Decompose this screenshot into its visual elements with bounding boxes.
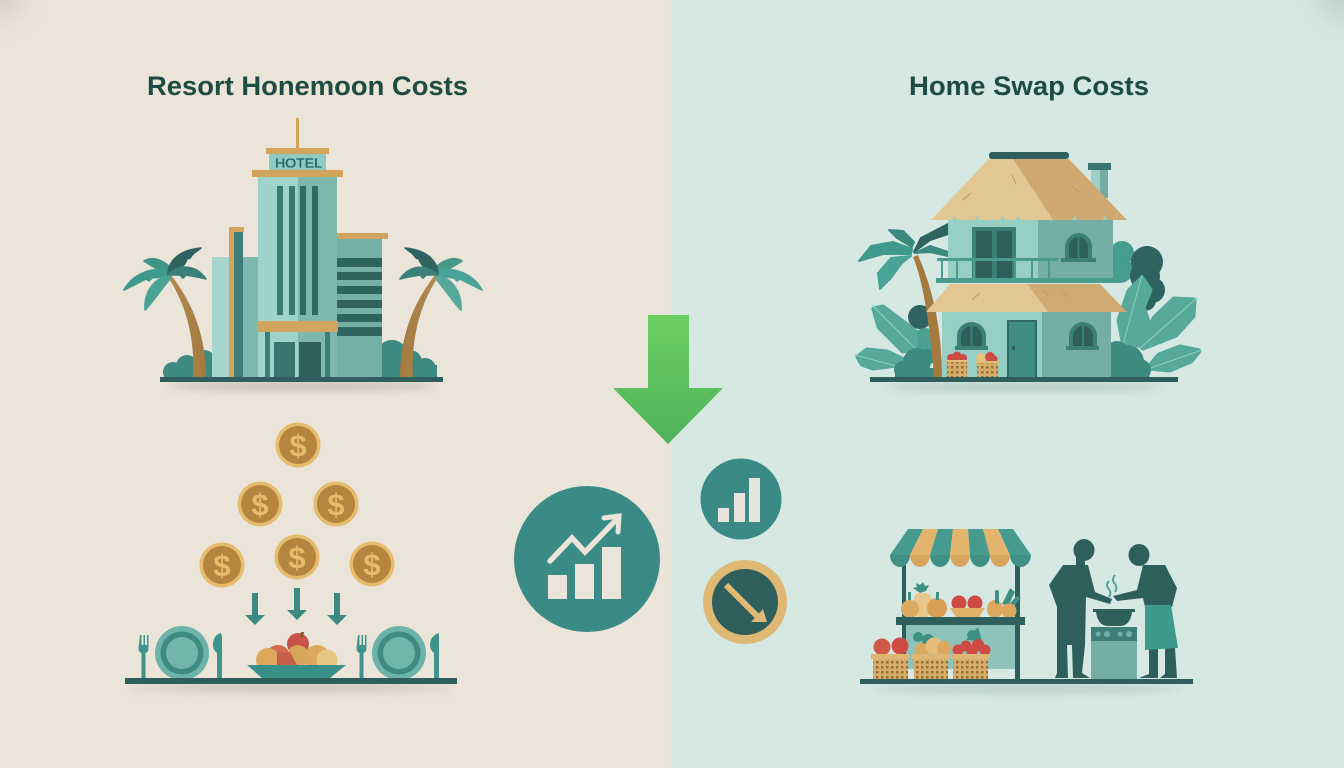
icon: falling arrow badge bbox=[703, 560, 787, 644]
plate right bbox=[372, 626, 426, 680]
upper wall bbox=[948, 220, 1038, 278]
panel: resort background bbox=[0, 0, 671, 768]
cutlery bbox=[138, 633, 439, 678]
palm right bbox=[400, 248, 482, 377]
entrance bbox=[265, 332, 270, 377]
illustration: thatched house bbox=[855, 152, 1202, 390]
door bbox=[1007, 320, 1037, 377]
table line bbox=[125, 678, 457, 684]
coin bbox=[274, 534, 320, 580]
upper roof bbox=[989, 152, 1069, 159]
coin bbox=[350, 542, 394, 586]
illustration: market and cooking bbox=[860, 529, 1193, 692]
icon: low bar chart bbox=[700, 458, 782, 540]
balcony window bbox=[972, 227, 1016, 278]
right wing bbox=[337, 239, 382, 377]
palm left bbox=[124, 248, 206, 377]
shadow bbox=[871, 686, 1181, 692]
baskets of fruit bbox=[946, 352, 999, 377]
ground shadow bbox=[166, 382, 436, 390]
lower wall bbox=[942, 312, 1042, 377]
coin bbox=[238, 482, 282, 526]
lower roof bbox=[926, 284, 1048, 312]
balcony rail bbox=[936, 258, 1122, 283]
ground shadow bbox=[884, 384, 1164, 390]
coin bbox=[200, 542, 244, 588]
arched window lower right bbox=[1069, 322, 1097, 346]
pot and steam bbox=[1093, 575, 1135, 626]
coin: $ bbox=[363, 547, 381, 582]
shadow bbox=[131, 685, 451, 691]
leaves bbox=[858, 278, 1199, 370]
illustration: hotel with palms: HOTEL bbox=[275, 156, 322, 170]
bushes bbox=[894, 341, 1151, 381]
bushes bbox=[163, 340, 437, 382]
stall frame bbox=[906, 625, 1015, 669]
ground line bbox=[160, 377, 443, 382]
awning bbox=[890, 529, 1031, 567]
counter bbox=[896, 617, 1025, 625]
arched window upper bbox=[1065, 233, 1092, 258]
left wing bbox=[212, 257, 258, 377]
panel: home swap background bbox=[671, 0, 1344, 768]
ground line bbox=[870, 377, 1178, 382]
center arrow bbox=[613, 315, 723, 444]
title: resort: Resort Honemoon Costs bbox=[147, 71, 468, 101]
title: home swap: Home Swap Costs bbox=[909, 71, 1149, 101]
illustration: hotel with palms bbox=[124, 118, 482, 390]
fruit bowl bbox=[247, 632, 346, 678]
produce on shelf bbox=[901, 582, 1021, 618]
coin bbox=[314, 482, 358, 526]
baskets bbox=[871, 627, 990, 679]
coin: $ bbox=[327, 487, 345, 522]
arched window lower left bbox=[957, 322, 986, 346]
coins and dining scene bbox=[125, 422, 457, 691]
ground line bbox=[860, 679, 1193, 684]
down arrows bbox=[245, 588, 347, 625]
icon: rising costs chart bbox=[514, 486, 660, 632]
coin: $ bbox=[288, 540, 306, 575]
plate left bbox=[155, 626, 209, 680]
person left bbox=[1049, 539, 1112, 678]
coin: $ bbox=[289, 428, 307, 463]
person right bbox=[1113, 544, 1178, 678]
coin: $ bbox=[251, 487, 269, 522]
stove bbox=[1091, 627, 1137, 679]
palm bbox=[859, 224, 948, 377]
coin: $ bbox=[213, 548, 231, 583]
chimney bbox=[1091, 170, 1100, 198]
tower bbox=[258, 177, 298, 377]
hotel sign bbox=[269, 154, 326, 170]
coin bbox=[276, 422, 320, 468]
foliage back bbox=[908, 241, 1165, 352]
corner vignette bbox=[0, 0, 1344, 19]
